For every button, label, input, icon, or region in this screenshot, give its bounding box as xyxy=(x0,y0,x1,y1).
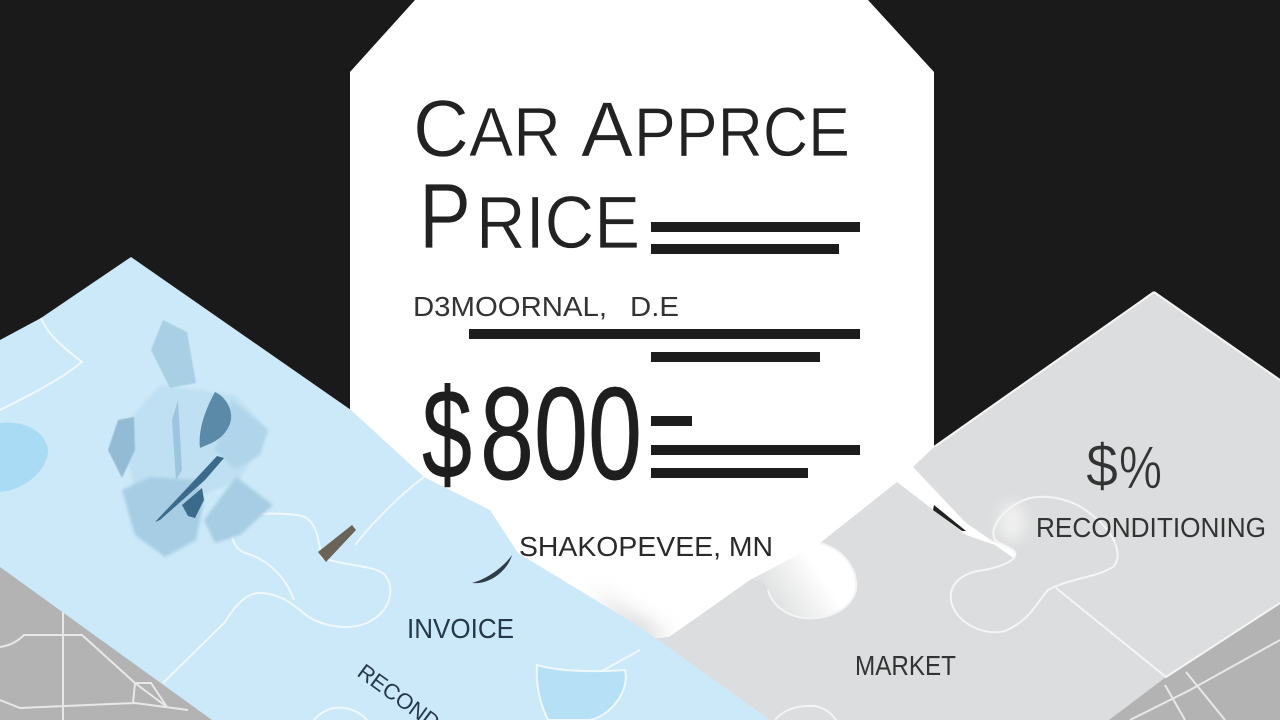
title letter A: A xyxy=(581,85,633,173)
piece seams xyxy=(0,318,640,720)
title letter P: P xyxy=(419,164,471,268)
dollar: $ xyxy=(1086,432,1118,499)
price xyxy=(422,360,642,507)
title letter C: C xyxy=(413,84,469,174)
piece edges xyxy=(934,292,1280,677)
gap shard right xyxy=(472,555,512,583)
puzzle: blue xyxy=(0,257,770,720)
circle left xyxy=(0,423,48,492)
location: SHAKOPEVEE, MN xyxy=(519,531,773,562)
reconditioning label: RECONDITIONING xyxy=(1036,512,1266,543)
subtitle suffix: D.E xyxy=(630,291,679,322)
notch shading xyxy=(750,543,856,618)
blue piece shape xyxy=(0,257,770,720)
title letters AR: AR xyxy=(469,93,561,171)
map: bottom right xyxy=(1105,595,1280,720)
dollar sign: $ xyxy=(422,363,472,506)
icon: dollar percent xyxy=(1086,432,1162,501)
price rules xyxy=(651,416,860,478)
lake bottom xyxy=(537,665,626,720)
price tag xyxy=(350,0,1030,660)
lower seam arc xyxy=(775,706,836,720)
percent: % xyxy=(1119,434,1162,501)
title rules xyxy=(651,222,860,254)
tab outline xyxy=(951,497,1118,632)
title xyxy=(413,84,850,268)
amount: 800 xyxy=(480,360,642,507)
subtitle word: D3MOORNAL, xyxy=(413,291,607,322)
map: bottom left xyxy=(0,560,230,720)
puzzle: market xyxy=(590,482,1166,720)
dark seam mark right xyxy=(933,505,966,531)
gap shard left xyxy=(318,525,356,562)
tag shape xyxy=(350,0,1030,660)
puzzle: reconditioning xyxy=(913,292,1280,677)
market seam outline xyxy=(768,543,856,618)
title letters RICE: RICE xyxy=(476,181,640,264)
invoice label: INVOICE xyxy=(407,613,514,644)
subtitle xyxy=(413,291,679,322)
market label: MARKET xyxy=(855,650,956,681)
reconditioning piece shape xyxy=(913,292,1280,677)
title letters PPRCE: PPRCE xyxy=(634,93,850,171)
subtitle rules xyxy=(469,329,860,362)
emblem illustration xyxy=(108,320,273,557)
tab highlight xyxy=(998,502,1026,542)
edge fade xyxy=(590,590,669,645)
market piece shape xyxy=(640,482,1166,720)
